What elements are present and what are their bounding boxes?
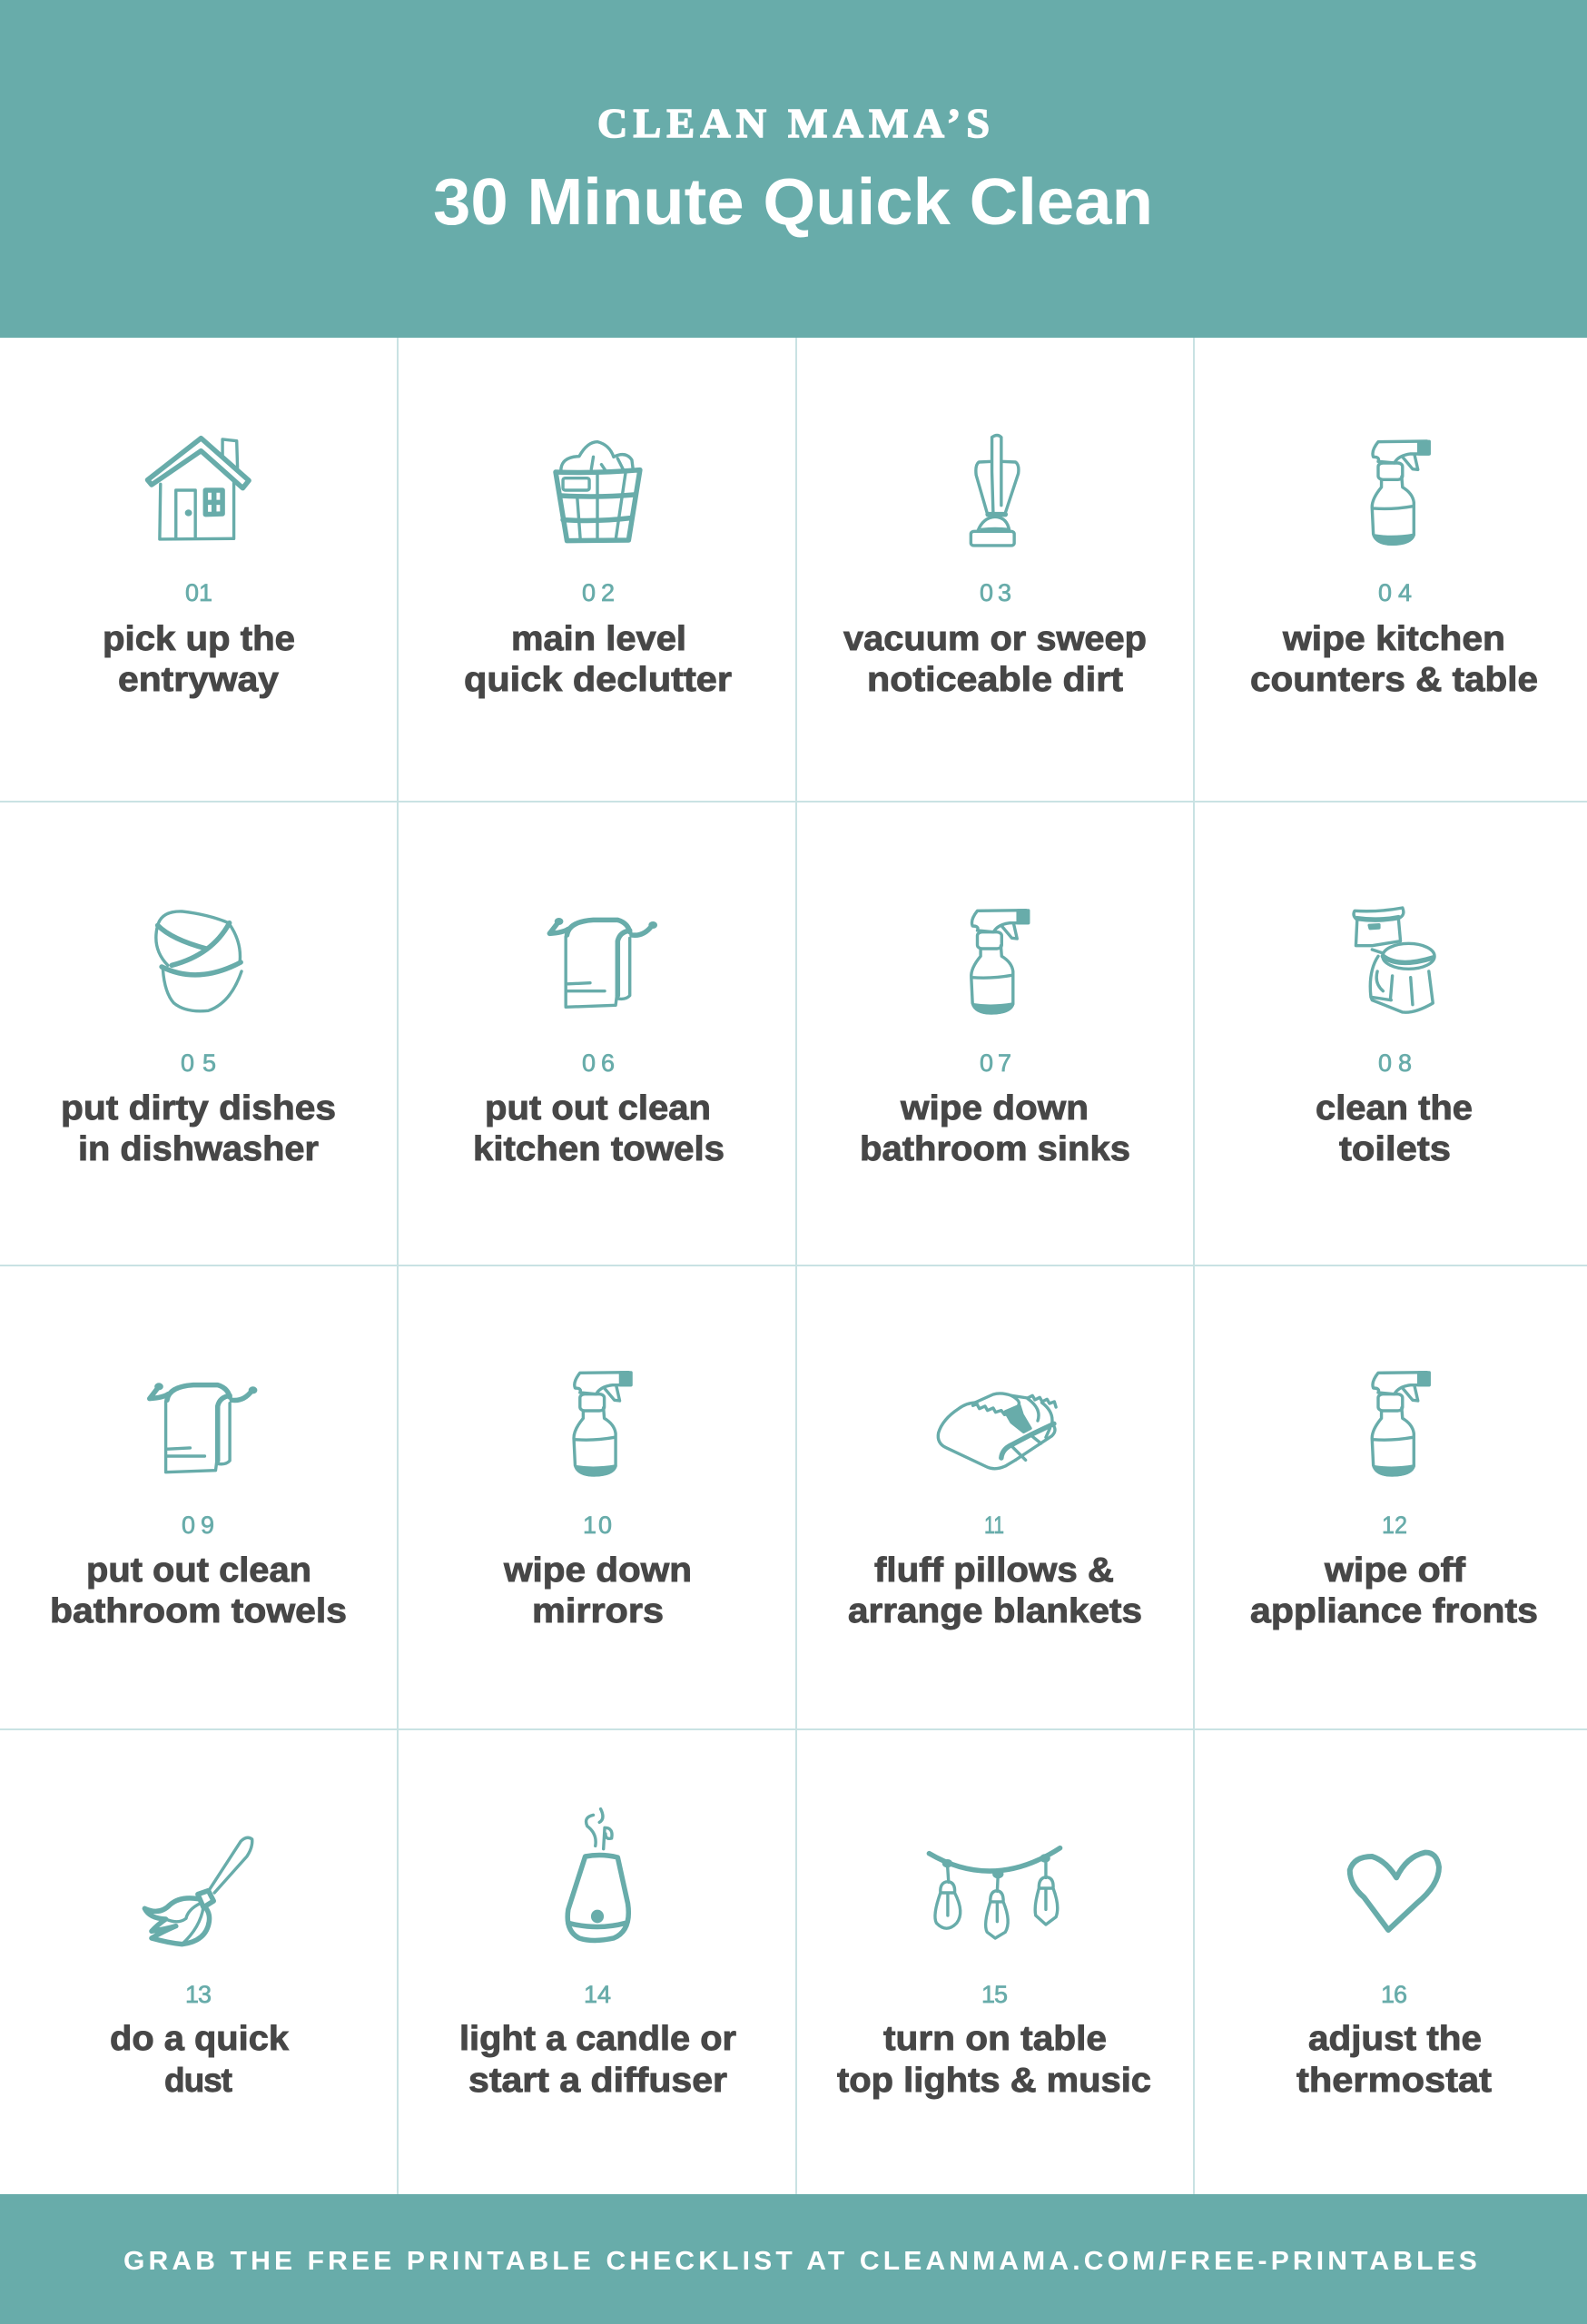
panel: task 12 [1194,1265,1587,1729]
icon: spray bottle [971,911,1029,1013]
icon: string lights [929,1848,1060,1938]
icon: bathroom towel [150,1384,256,1472]
icon: kitchen towel [549,920,656,1007]
label: put out clean kitchen towels [473,1089,724,1168]
label: turn on table top lights & music: turn on table [883,2020,1107,2058]
label: pick up the entryway: entryway [118,661,279,699]
number 10: 10 [583,1512,612,1539]
panel: task 02 [398,338,796,802]
panel: task 04 [1194,338,1587,802]
label: do a quick dust: do a quick [110,2020,290,2058]
label: put dirty dishes in dishwasher: put dirty dishes [61,1089,336,1128]
icon: house [147,438,249,539]
panel: task 09 [0,1265,398,1729]
label: wipe kitchen counters & table [1250,620,1538,699]
icon: heart [1350,1853,1439,1930]
panel: task 10 [398,1265,796,1729]
number 12: 12 [1382,1512,1407,1539]
number 09: 09 [182,1512,214,1539]
label: wipe down bathroom sinks: wipe down [900,1089,1089,1128]
icon: feather duster [144,1837,252,1945]
title: 30 Minute Quick Clean [433,166,1153,239]
panel: task 16 [1194,1729,1587,2194]
label: pick up the entryway: pick up the [103,620,295,658]
label: vacuum or sweep noticeable dirt: noticeable dirt [867,661,1123,699]
icon: laundry basket [556,442,640,541]
number 11: 11 [984,1512,1004,1539]
number 13: 13 [185,1981,212,2008]
label: fluff pillows & arrange blankets [848,1551,1142,1630]
label: clean the toilets: clean the [1316,1089,1473,1128]
label: do a quick dust [110,2020,290,2099]
label: put out clean bathroom towels: put out clean [86,1551,311,1590]
number 05: 05 [181,1049,216,1077]
icon: spray bottle [574,1373,631,1475]
panel: task 13 [0,1729,398,2194]
label: wipe down mirrors: mirrors [532,1592,664,1630]
panel: task 07 [796,802,1194,1265]
label: clean the toilets [1316,1089,1473,1168]
number 07: 07 [980,1049,1011,1077]
icon: spray bottle [1372,1373,1429,1475]
label: put out clean bathroom towels [50,1551,347,1630]
panel: task 06 [398,802,796,1265]
icon: vacuum [971,435,1019,546]
eyebrow heading: CLEAN MAMA’S [597,100,990,146]
label: do a quick dust: dust [164,2062,232,2099]
label: wipe down mirrors [503,1551,692,1630]
label: wipe down mirrors: wipe down [503,1551,692,1590]
icon: folded blanket [938,1393,1056,1469]
label: vacuum or sweep noticeable dirt: vacuum or sweep [843,620,1147,658]
number 16: 16 [1381,1981,1407,2008]
label: light a candle or start a diffuser: light a candle or [459,2020,736,2058]
label: turn on table top lights & music [837,2020,1151,2100]
number 14: 14 [584,1981,611,2008]
footer call to action: GRAB THE FREE PRINTABLE CHECKLIST AT CLEANMAMA.COM/FREE-PRINTABLES [123,2247,1481,2276]
label: clean the toilets: toilets [1339,1130,1451,1168]
panel: task 01 [0,338,398,802]
label: fluff pillows & arrange blankets: fluff pillows & [874,1551,1114,1590]
panel: task 08 [1194,802,1587,1265]
label: main level quick declutter [464,620,732,699]
label: adjust the thermostat: thermostat [1296,2062,1492,2100]
number 15: 15 [981,1981,1008,2008]
label: wipe kitchen counters & table: wipe kitchen [1282,620,1505,658]
panel: task 05 [0,802,398,1265]
icon: stacked bowls [156,911,242,1011]
label: wipe kitchen counters & table: counters & table [1250,661,1538,699]
label: main level quick declutter: main level [511,620,686,658]
label: adjust the thermostat: adjust the [1308,2020,1482,2058]
label: wipe off appliance fronts: appliance fronts [1250,1592,1538,1630]
label: pick up the entryway [103,620,295,699]
icon: toilet [1354,908,1434,1012]
number 06: 06 [582,1049,615,1077]
label: put dirty dishes in dishwasher: in dishwasher [78,1130,319,1168]
label: vacuum or sweep noticeable dirt [843,620,1147,699]
label: put out clean bathroom towels: bathroom towels [50,1592,347,1630]
label: put dirty dishes in dishwasher [61,1089,336,1168]
number 01: 01 [185,579,212,606]
label: wipe down bathroom sinks: bathroom sinks [860,1130,1130,1168]
panel: task 15 [796,1729,1194,2194]
number 03: 03 [980,579,1011,606]
icon: diffuser [567,1809,628,1940]
label: main level quick declutter: quick declutter [464,661,732,699]
label: wipe off appliance fronts [1250,1551,1538,1630]
label: wipe down bathroom sinks [860,1089,1130,1168]
header banner [0,0,1587,338]
label: put out clean kitchen towels: put out clean [485,1089,711,1128]
label: put out clean kitchen towels: kitchen towels [473,1130,724,1168]
footer banner [0,2194,1587,2324]
label: wipe off appliance fronts: wipe off [1324,1551,1465,1590]
panel: task 14 [398,1729,796,2194]
number 04: 04 [1378,579,1412,606]
icon: spray bottle [1372,441,1429,544]
label: light a candle or start a diffuser: start a diffuser [468,2062,727,2100]
panel: task 03 [796,338,1194,802]
panel: task 11 [796,1265,1194,1729]
label: turn on table top lights & music: top lights & music [837,2062,1151,2100]
number 02: 02 [582,579,615,606]
number 08: 08 [1378,1049,1412,1077]
label: fluff pillows & arrange blankets: arrange blankets [848,1592,1142,1630]
label: adjust the thermostat [1296,2020,1492,2100]
label: light a candle or start a diffuser [459,2020,736,2100]
